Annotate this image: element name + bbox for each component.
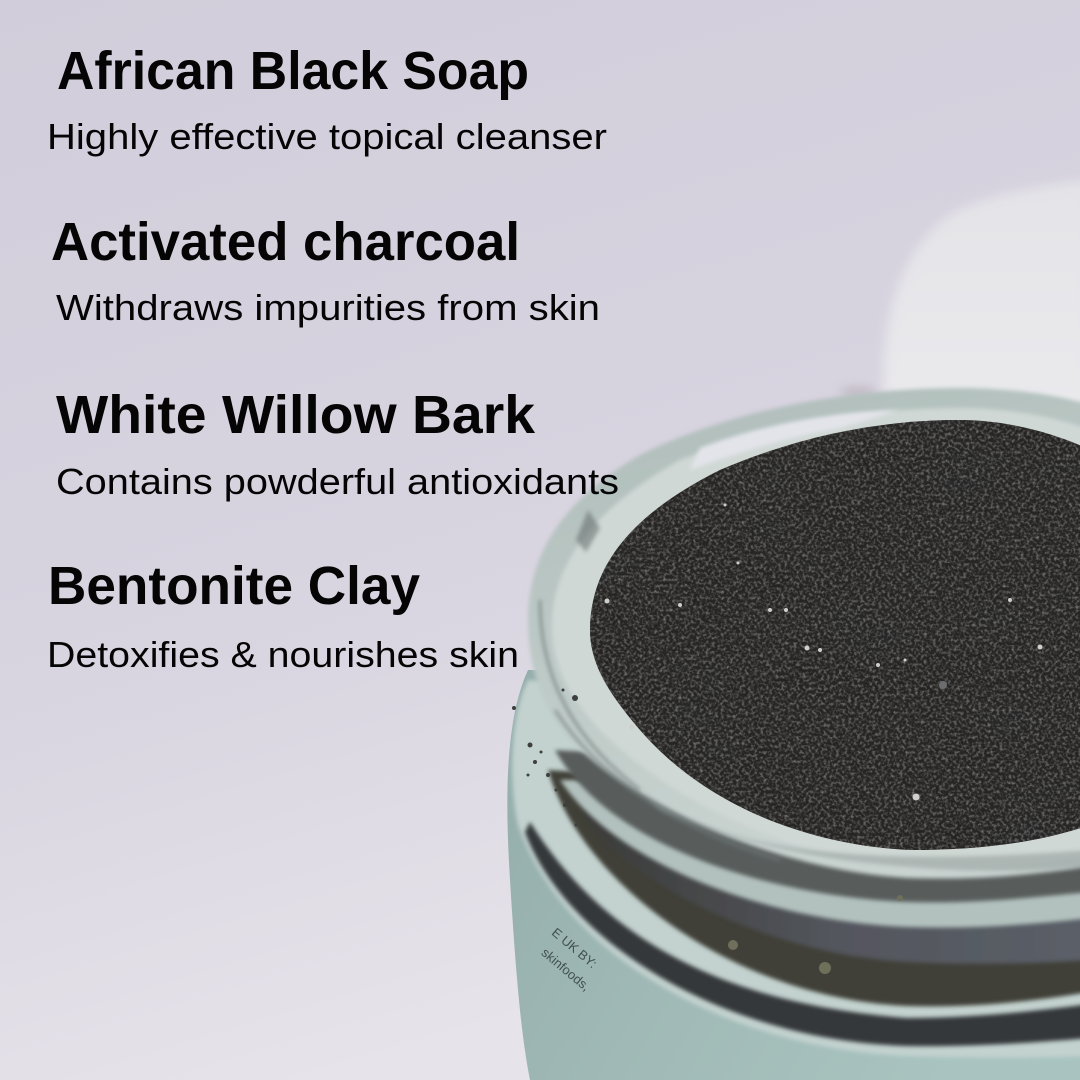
jar body label xyxy=(507,670,1080,1080)
pale flakes on residue xyxy=(728,895,903,974)
dark rim shadow xyxy=(555,750,1080,902)
powder residue band xyxy=(548,770,1080,1006)
heading: White Willow Bark xyxy=(56,385,536,445)
heading: African Black Soap xyxy=(57,41,529,101)
heading: Activated charcoal xyxy=(51,212,520,272)
light glass ring xyxy=(560,780,1080,928)
rim left streaks xyxy=(540,600,780,860)
glass rim xyxy=(528,388,1080,878)
description: Withdraws impurities from skin xyxy=(56,287,600,328)
pale highlights at back of glass xyxy=(690,410,900,470)
white speckles xyxy=(604,504,1042,800)
description: Highly effective topical cleanser xyxy=(47,116,607,157)
description: Detoxifies & nourishes skin xyxy=(47,634,519,675)
lower glass neck xyxy=(512,680,1080,1058)
jar xyxy=(507,388,1080,1080)
black powder xyxy=(590,420,1080,850)
ingredient: African Black Soap xyxy=(47,41,607,157)
inner glass wall xyxy=(552,408,1080,869)
jar label text xyxy=(535,925,607,994)
dark neck line xyxy=(525,822,1080,1046)
ingredient: Bentonite Clay xyxy=(47,556,519,675)
heading: Bentonite Clay xyxy=(48,556,420,616)
jar label text: skinfoods, xyxy=(539,945,593,994)
jar lid xyxy=(840,180,1080,420)
rim shading under powder xyxy=(640,790,1080,871)
ingredient: White Willow Bark xyxy=(56,385,619,502)
powder residue specks on glass xyxy=(512,688,578,826)
jar label text: E UK BY: xyxy=(549,925,600,971)
ingredient: Activated charcoal xyxy=(51,212,600,328)
description: Contains powderful antioxidants xyxy=(56,461,619,502)
grey glass band xyxy=(580,780,1080,964)
